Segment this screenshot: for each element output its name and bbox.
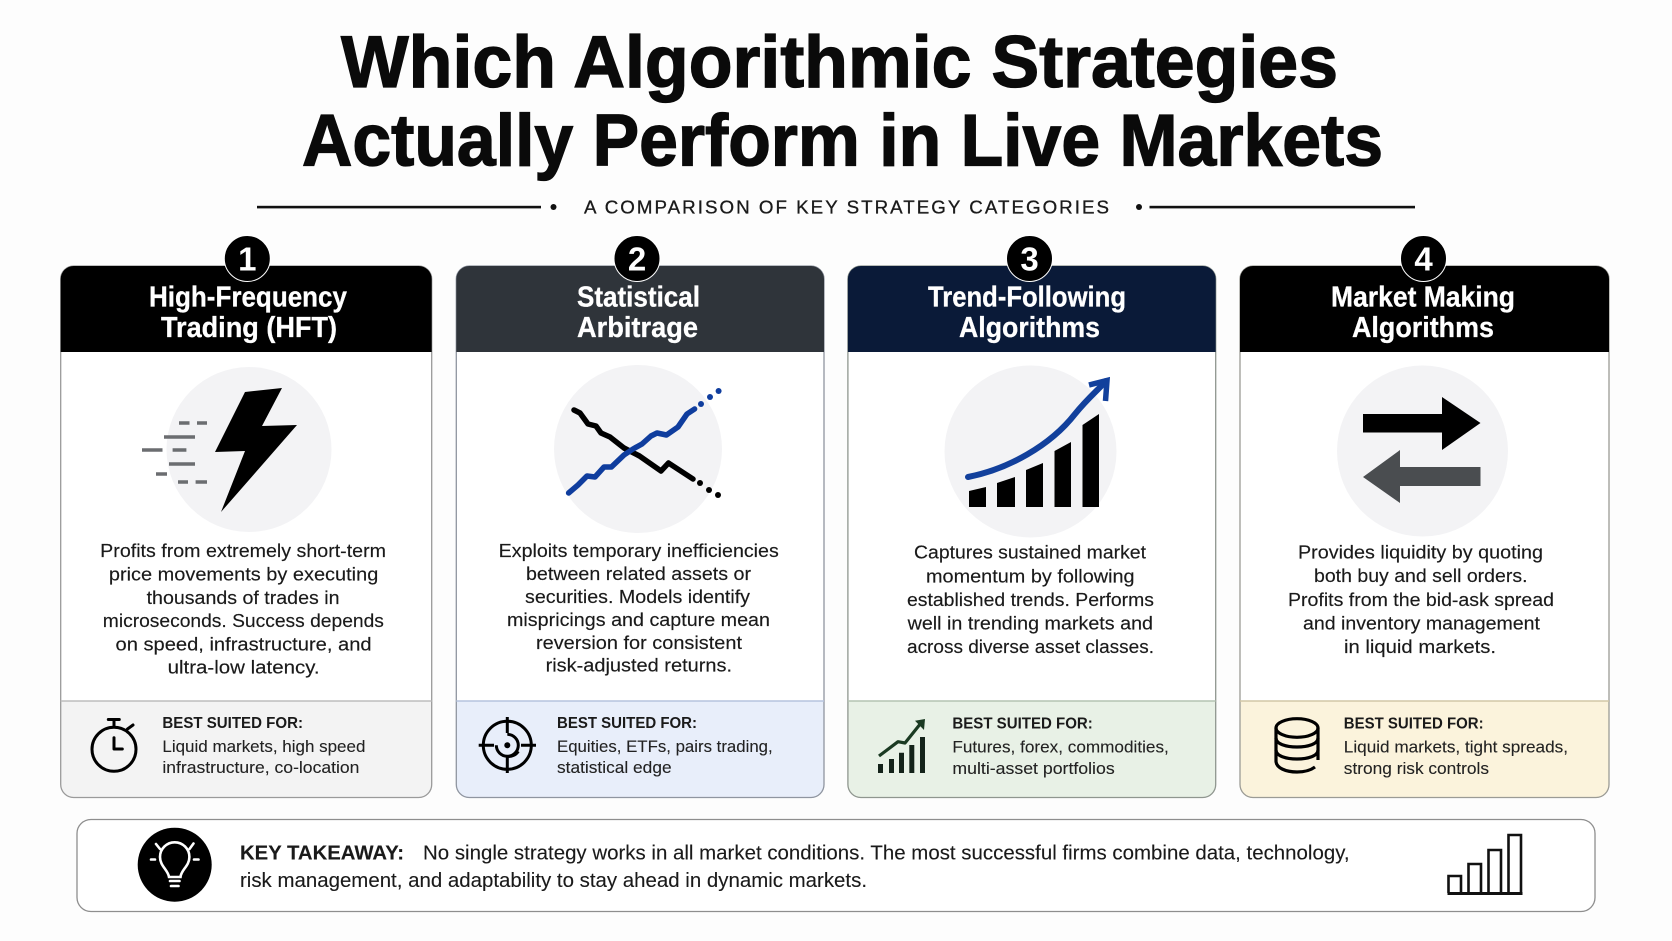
subtitle: A COMPARISON OF KEY STRATEGY CATEGORIES <box>584 196 1111 218</box>
icon: rising bars with trend arrow <box>944 366 1116 538</box>
card 1 description: on speed, infrastructure, and <box>116 634 372 654</box>
card 3 best suited for: BEST SUITED FOR: <box>952 716 1093 732</box>
card 3 header: Trend-Following <box>928 282 1126 314</box>
card 1 header: High-Frequency <box>149 282 347 314</box>
card 3 footer background <box>848 701 1216 798</box>
number badge 2 <box>614 236 660 282</box>
title <box>302 22 1383 182</box>
number badge 3 <box>1006 236 1052 282</box>
card 2 best suited for: statistical edge <box>557 759 672 777</box>
card 1 description: Profits from extremely short-term <box>100 540 386 561</box>
card 2 footer background <box>456 701 824 798</box>
panel: Statistical Arbitrage <box>456 236 824 798</box>
icon: lightning bolt with speed lines <box>142 367 332 532</box>
panel: Trend-Following Algorithms <box>848 236 1216 798</box>
icon: database cylinder <box>1276 719 1318 772</box>
card 1 best suited for: Liquid markets, high speed <box>162 738 365 756</box>
card 2 description <box>499 540 779 676</box>
card 3 best suited for: Futures, forex, commodities, <box>952 738 1169 756</box>
card 2 description: mispricings and capture mean <box>507 609 770 630</box>
card 4 best suited for: Liquid markets, tight spreads, <box>1344 738 1568 756</box>
card 4 description: and inventory management <box>1303 612 1540 634</box>
card 4 description: Provides liquidity by quoting <box>1298 542 1543 562</box>
card 4 header <box>1240 266 1609 352</box>
panel: key takeaway <box>77 820 1595 912</box>
card 1 best suited for: infrastructure, co-location <box>162 759 359 777</box>
card 2 description: between related assets or <box>526 563 751 584</box>
card 2 description: Exploits temporary inefficiencies <box>499 540 779 561</box>
icon: two-way arrows <box>1337 366 1508 536</box>
card 2 header <box>456 266 824 352</box>
icon: stopwatch <box>92 720 136 771</box>
number badge 4 <box>1400 236 1446 282</box>
card 1 header: Trading (HFT) <box>161 312 337 344</box>
card 4 header: Market Making <box>1331 282 1515 314</box>
title: Which Algorithmic Strategies <box>341 22 1338 103</box>
card 2 best suited for: Equities, ETFs, pairs trading, <box>557 738 773 756</box>
card 4 best suited for: strong risk controls <box>1344 760 1489 778</box>
card 3 best suited for <box>952 716 1169 778</box>
subtitle <box>257 196 1415 218</box>
number badge 2: 2 <box>628 240 646 278</box>
number badge 1: 1 <box>238 240 256 278</box>
card 3 best suited for: multi-asset portfolios <box>952 760 1115 778</box>
card 2 best suited for <box>557 715 773 777</box>
card 4 description: Profits from the bid-ask spread <box>1288 589 1554 610</box>
title: Actually Perform in Live Markets <box>302 100 1383 182</box>
card 3 description: well in trending markets and <box>907 612 1153 634</box>
card 4 description <box>1288 542 1554 657</box>
card 3 header: Algorithms <box>959 312 1100 344</box>
card 2 description: securities. Models identify <box>525 586 751 607</box>
card 1 description: price movements by executing <box>109 564 378 584</box>
card 1 footer background <box>61 701 432 798</box>
takeaway text: KEY TAKEAWAY: <box>240 842 404 864</box>
card 1 description: microseconds. Success depends <box>103 610 384 631</box>
icon: target crosshair <box>479 717 536 773</box>
panel: High-Frequency Trading <box>61 236 432 798</box>
icon: light bulb <box>138 828 212 902</box>
card 1 description: thousands of trades in <box>147 587 340 608</box>
takeaway text <box>240 842 1350 892</box>
card 3 header <box>848 266 1216 352</box>
card 1 best suited for: BEST SUITED FOR: <box>162 715 303 732</box>
card 4 description: in liquid markets. <box>1344 636 1496 657</box>
card 4 best suited for <box>1344 716 1568 778</box>
card 3 description: across diverse asset classes. <box>907 636 1154 657</box>
card 2 description: risk-adjusted returns. <box>546 654 732 676</box>
card 4 header: Algorithms <box>1352 312 1494 344</box>
card 1 description <box>100 540 386 678</box>
card 2 best suited for: BEST SUITED FOR: <box>557 715 697 732</box>
card 3 description: Captures sustained market <box>914 542 1146 562</box>
icon: outlined bar chart <box>1448 835 1522 894</box>
card 3 description <box>907 542 1154 657</box>
icon: small chart with arrow <box>878 719 925 773</box>
card 2 header: Statistical <box>577 282 700 314</box>
panel: Market Making Algorithms <box>1240 236 1609 798</box>
number badge 3: 3 <box>1020 240 1039 278</box>
card 4 description: both buy and sell orders. <box>1314 565 1528 586</box>
takeaway text: risk management, and adaptability to stay ahead in dynamic markets. <box>240 870 867 892</box>
card 3 description: momentum by following <box>926 566 1135 586</box>
card 2 header: Arbitrage <box>577 312 698 344</box>
card 1 description: ultra-low latency. <box>168 656 320 678</box>
card 4 footer background <box>1240 701 1609 798</box>
card 3 description: established trends. Performs <box>907 589 1154 610</box>
card 2 description: reversion for consistent <box>536 632 742 653</box>
number badge 4: 4 <box>1414 240 1433 278</box>
takeaway text: No single strategy works in all market conditions. The most successful firms combine data, technology, <box>423 842 1350 864</box>
icon: crossing price lines <box>554 365 722 533</box>
number badge 1 <box>224 236 270 282</box>
card 4 best suited for: BEST SUITED FOR: <box>1344 716 1484 732</box>
card 1 best suited for <box>162 715 365 777</box>
card 1 header <box>61 266 432 352</box>
